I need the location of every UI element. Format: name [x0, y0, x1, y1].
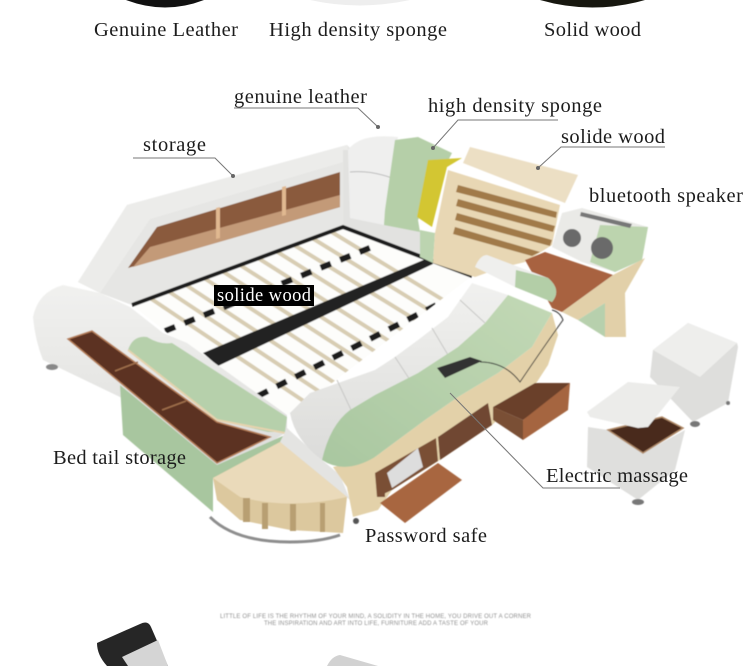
icon: remote control	[97, 623, 168, 666]
side panel with wood slats	[433, 147, 578, 277]
green massage surface	[322, 295, 552, 467]
storage cubbies	[438, 403, 492, 460]
solide wood cover board	[463, 147, 578, 203]
side storage headboard wing	[78, 145, 352, 305]
front ottoman with open lid	[587, 382, 685, 505]
tan base	[333, 313, 558, 517]
callout: genuine leather: genuine leather	[234, 86, 367, 108]
bluetooth speaker console	[552, 208, 648, 272]
cushion seams	[337, 300, 485, 412]
faint tagline: THE INSPIRATION AND ART INTO LIFE, FURNITURE ADD A TASTE OF YOUR	[264, 621, 489, 627]
faint tagline	[220, 614, 532, 627]
tan corner table with chrome base	[210, 428, 359, 542]
callout: Electric massage	[450, 393, 688, 488]
bed illustration	[33, 136, 738, 542]
back headrest cushions	[348, 136, 462, 263]
callout: Electric massage: Electric massage	[546, 465, 688, 487]
callout: genuine leather	[234, 86, 380, 129]
callout: solide wood on black box: solide wood	[217, 286, 312, 306]
callout: Password safe: Password safe	[365, 525, 487, 547]
pillow roll	[475, 255, 556, 302]
callout: Bed tail storage: Bed tail storage	[53, 447, 186, 469]
bed side massage lounge	[290, 255, 563, 517]
white cushion band	[290, 283, 508, 460]
wood shelf and leg	[525, 252, 645, 337]
callout: bluetooth speaker: bluetooth speaker	[589, 185, 743, 207]
rear ottoman	[650, 323, 738, 427]
password safe and flap	[377, 448, 462, 523]
partial grey product at bottom	[327, 655, 378, 666]
callout: high density sponge	[428, 95, 602, 150]
callout: solide wood board: solide wood	[561, 126, 665, 148]
pull-out drawer	[493, 383, 570, 440]
callout: storage: storage	[143, 134, 206, 156]
slatted base: solid wood	[130, 224, 472, 402]
callout: solide wood board	[536, 126, 665, 170]
top material swatches	[126, 0, 645, 8]
controller and cable	[437, 357, 482, 378]
grey wall under headrest	[343, 150, 433, 263]
bed tail storage footboard	[33, 285, 287, 512]
material caption: Solid wood: Solid wood	[544, 19, 641, 41]
faint tagline: LITTLE OF LIFE IS THE RHYTHM OF YOUR MIND, A SOLIDITY IN THE HOME, YOU DRIVE OUT A CORNER	[220, 614, 532, 620]
material caption: Genuine Leather: Genuine Leather	[94, 19, 238, 41]
callout: high density sponge: high density sponge	[428, 95, 602, 117]
callout: storage	[133, 134, 235, 178]
material caption: High density sponge: High density sponge	[269, 19, 447, 41]
